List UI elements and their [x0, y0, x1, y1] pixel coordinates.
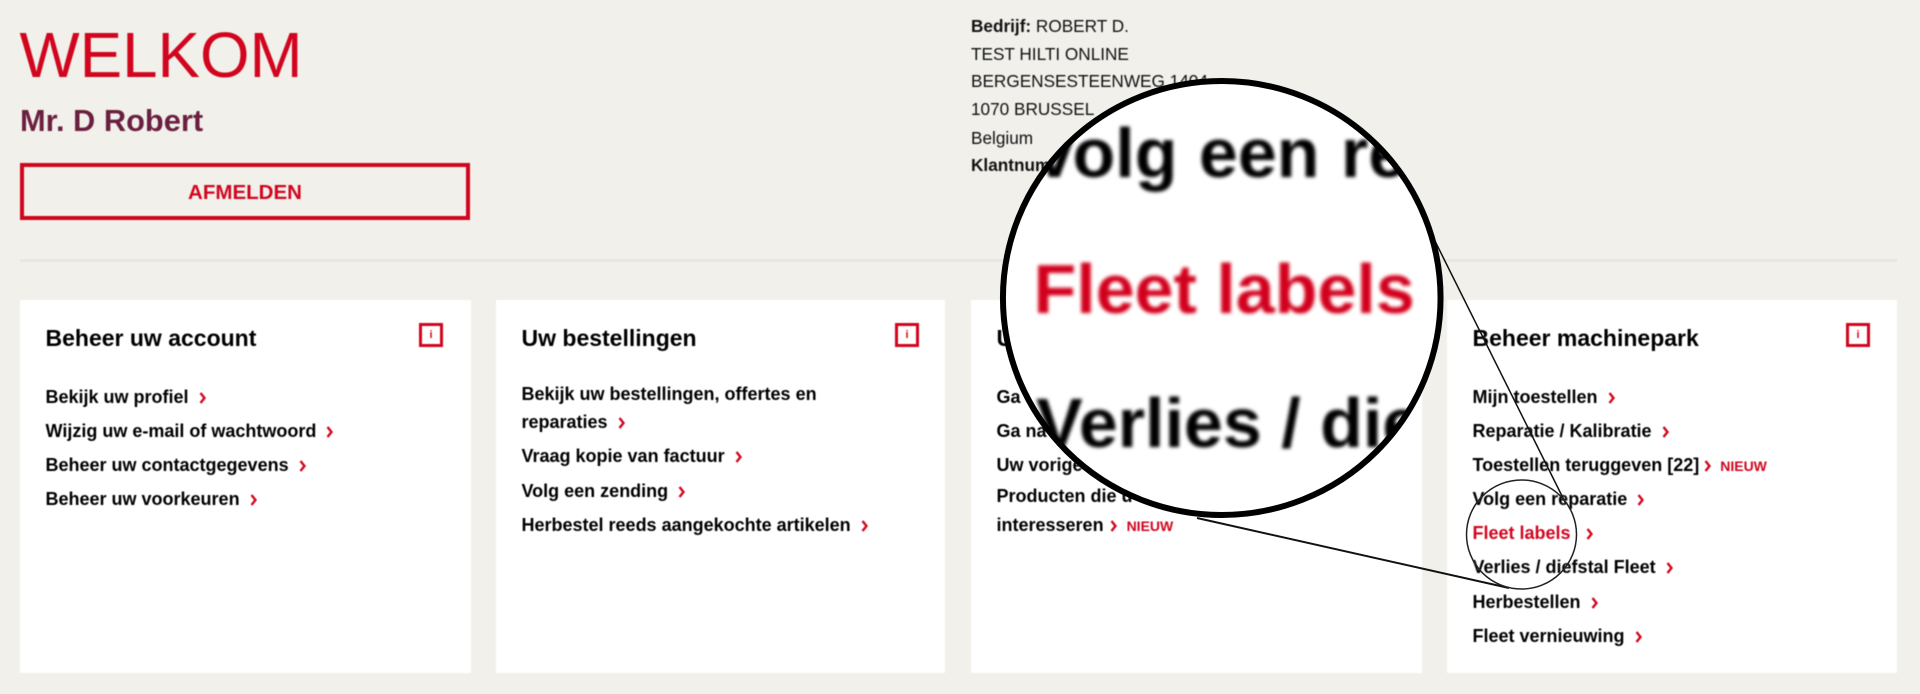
magnified text	[1034, 124, 1415, 452]
connector lines	[1197, 227, 1566, 588]
link: Verlies / diefstal Fleet	[1472, 557, 1656, 577]
button: afmelden: AFMELDEN	[188, 181, 302, 204]
link, visible part: Ga na	[996, 421, 1047, 441]
company details text block: Belgium	[971, 128, 1033, 148]
icon: info	[895, 322, 919, 346]
link: Herbestel reeds aangekochte artikelen	[522, 515, 851, 535]
link, first line: Bekijk uw bestellingen, offertes en	[522, 384, 817, 404]
link, visible part: Ga	[996, 387, 1021, 407]
link, visible part: Uw vorige	[996, 455, 1083, 475]
company details text block: Klantnummer:	[971, 155, 1088, 175]
panel: uw bestellingen	[496, 300, 945, 673]
link: Mijn toestellen	[1472, 387, 1598, 407]
panel heading: Beheer uw account	[46, 325, 256, 351]
link with new badge: interesseren NIEUW	[996, 515, 1173, 535]
panel heading: Beheer machinepark	[1472, 325, 1699, 351]
magnifier callout overlay	[1000, 78, 1578, 590]
link: Volg een reparatie	[1472, 489, 1627, 509]
magnifier lens	[1000, 78, 1444, 518]
link: Bekijk uw profiel	[46, 387, 189, 407]
icon: info	[1846, 322, 1870, 346]
company details text block: Bedrijf: ROBERT D.	[971, 16, 1129, 36]
link: Beheer uw voorkeuren	[46, 489, 240, 509]
panel: third card, mostly hidden by magnifier	[971, 300, 1422, 673]
panel heading: Uw bestellingen	[522, 325, 697, 351]
icon: info: i	[429, 328, 433, 340]
panel heading, visible part: U	[996, 325, 1013, 351]
company details text block: BERGENSESTEENWEG 1404	[971, 71, 1208, 91]
company details text block: 1070 BRUSSEL	[971, 99, 1094, 119]
title: WELKOM: WELKOM	[20, 20, 303, 91]
user name: Mr. D Robert	[20, 102, 203, 138]
link, second line: reparaties	[522, 412, 608, 432]
link: Vraag kopie van factuur	[522, 446, 725, 466]
link: Volg een zending	[522, 481, 668, 501]
icon: info	[419, 322, 443, 346]
magnified text: Volg een reparatie	[1031, 114, 1637, 192]
icon: info: i	[1856, 328, 1860, 340]
link with new badge: Toestellen teruggeven [22] NIEUW	[1472, 455, 1767, 475]
panel: beheer uw account	[20, 300, 471, 673]
link: Reparatie / Kalibratie	[1472, 421, 1652, 441]
panel: beheer machinepark	[1447, 300, 1897, 673]
magnified text: Fleet labels	[1034, 250, 1415, 328]
company details text block: TEST HILTI ONLINE	[971, 44, 1129, 64]
link: highlighted fleet labels: Fleet labels	[1472, 523, 1571, 543]
company details text block	[970, 16, 1208, 175]
magnified text: Verlies / diefstal	[1036, 384, 1565, 462]
small focus circle around fleet labels	[1466, 480, 1576, 589]
link: Fleet vernieuwing	[1472, 626, 1625, 646]
link: Wijzig uw e-mail of wachtwoord	[46, 421, 316, 441]
button: afmelden	[20, 163, 470, 220]
icon: info: i	[905, 328, 909, 340]
link: Herbestellen	[1472, 592, 1581, 612]
link, visible part: Producten die u	[996, 486, 1133, 506]
link: Beheer uw contactgegevens	[46, 455, 289, 475]
